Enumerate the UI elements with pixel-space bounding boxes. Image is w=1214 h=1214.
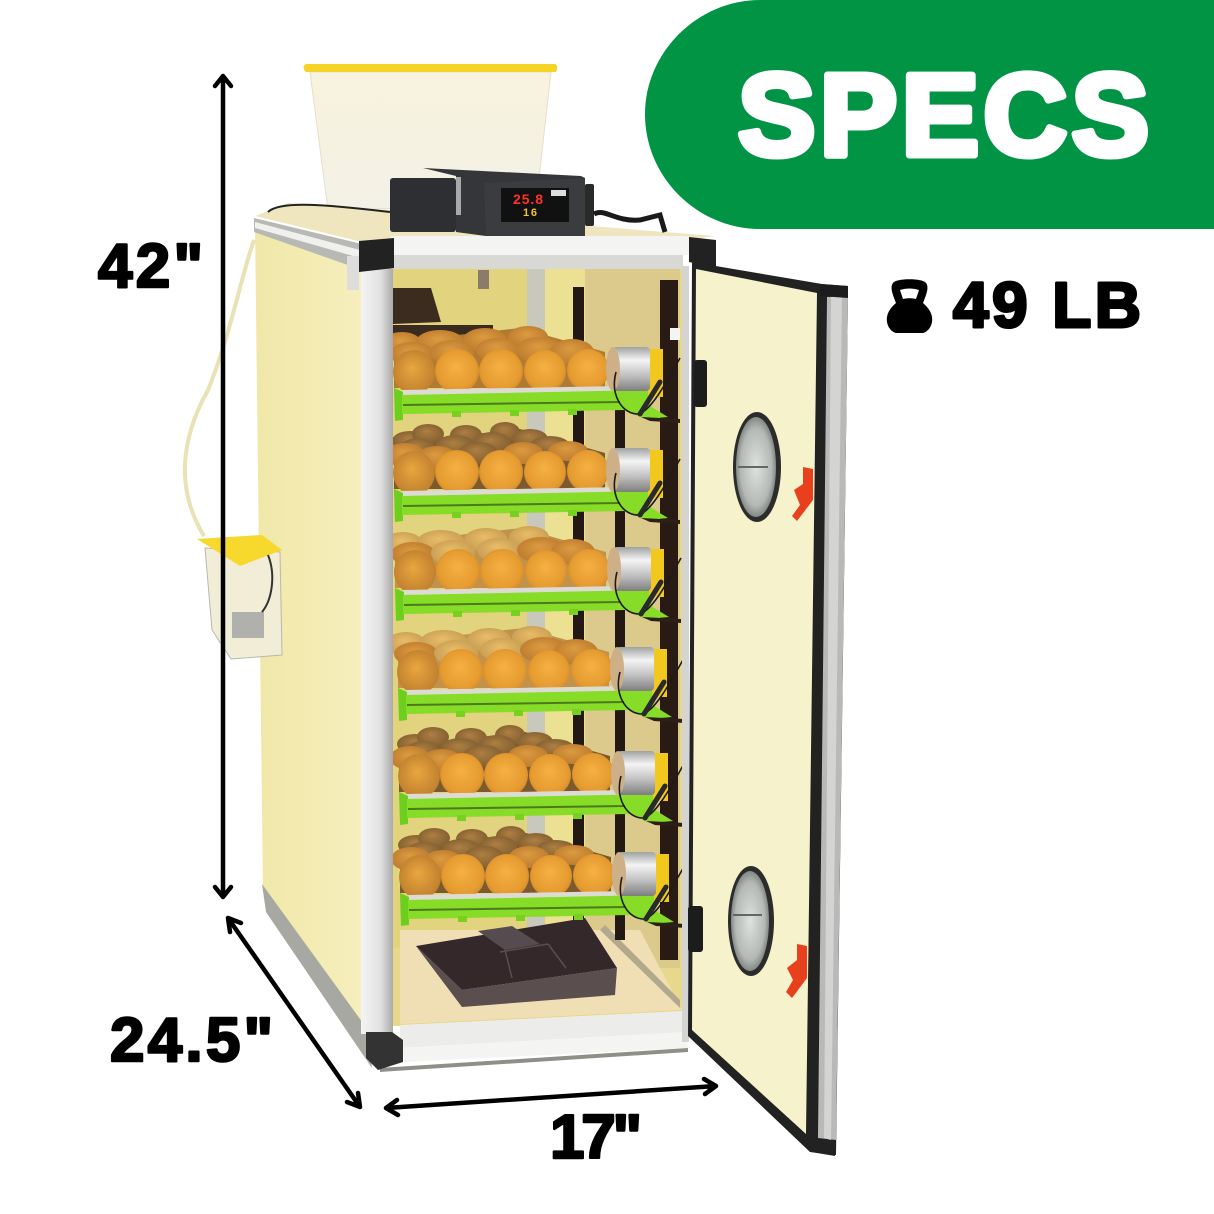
side panel <box>254 218 372 1068</box>
red latch bottom <box>786 944 807 998</box>
egg tray 3 <box>383 526 681 623</box>
label: width 17 in: 17" <box>550 1103 642 1172</box>
water bottle on side <box>197 535 282 659</box>
hinge top <box>694 360 707 407</box>
digital display <box>501 188 569 222</box>
red latch top <box>792 467 813 521</box>
arrow: width <box>386 1079 716 1115</box>
open door <box>688 262 848 1156</box>
incubator cabinet <box>185 64 848 1156</box>
egg tray 5 <box>390 725 685 827</box>
title banner: SPECS <box>645 0 1214 229</box>
label: depth 24.5 in: 24.5" <box>110 1006 273 1075</box>
hinge bottom <box>688 906 703 952</box>
door window top <box>733 412 781 522</box>
arrow: height <box>215 76 231 897</box>
interior chamber <box>393 266 683 1026</box>
egg tray 2 <box>385 422 680 524</box>
label: height 42 in: 42" <box>98 232 203 301</box>
icon: kettlebell <box>887 279 932 333</box>
weight label: 49 LB: 49 LB <box>953 269 1141 341</box>
water bucket with yellow lid <box>304 64 557 210</box>
digital display: 25.8 <box>513 191 543 207</box>
egg tray 6 <box>391 826 686 928</box>
door window bottom <box>728 866 774 976</box>
digital display: 16 <box>523 207 537 219</box>
top surface <box>255 203 715 242</box>
front frame <box>359 236 716 1072</box>
humidity tray <box>416 918 617 1007</box>
controller unit <box>390 168 665 236</box>
egg tray 1 <box>382 326 680 423</box>
title banner: SPECS: SPECS <box>738 50 1149 180</box>
water tube <box>185 205 390 536</box>
egg tray 4 <box>386 626 684 723</box>
arrow: depth <box>228 918 360 1107</box>
